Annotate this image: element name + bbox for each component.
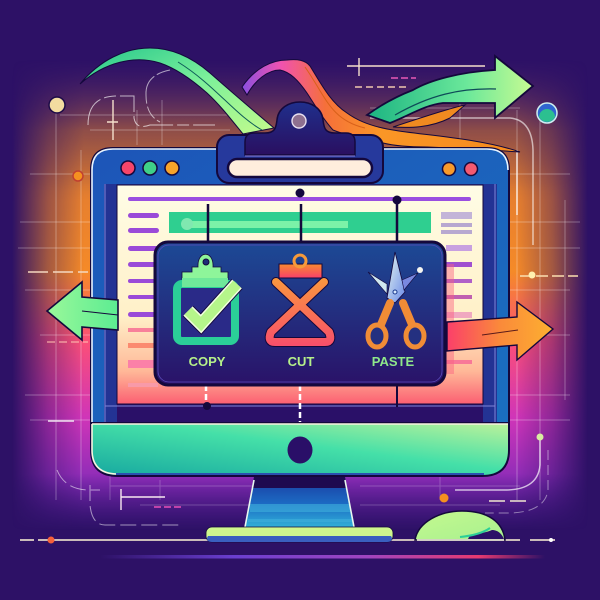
background dots — [49, 97, 557, 502]
label: cut: CUT — [288, 354, 314, 369]
toolbar connector lines — [204, 189, 401, 424]
window buttons — [121, 161, 478, 176]
screen base strip — [117, 404, 483, 424]
gradient underline — [100, 555, 545, 558]
label: copy: COPY — [189, 354, 226, 369]
decorative crosses and dashes — [28, 58, 578, 510]
icon panel — [155, 242, 445, 385]
monitor stand — [245, 477, 354, 527]
right text lines — [441, 212, 472, 374]
monitor bezel — [91, 148, 509, 423]
page header line — [128, 197, 471, 201]
right orange arrow — [447, 302, 553, 360]
left green arrow — [47, 282, 118, 340]
power button — [288, 436, 312, 464]
icon: paste scissors — [368, 252, 424, 347]
label: paste: PASTE — [372, 354, 415, 369]
monitor base — [206, 527, 393, 542]
chin of monitor — [91, 423, 509, 476]
mouse — [415, 511, 505, 540]
background — [14, 73, 586, 522]
ribbon arrow: purple to orange — [242, 60, 520, 152]
background grid and dashed lines — [18, 70, 580, 525]
clipboard clip — [217, 102, 383, 183]
floor line — [20, 536, 555, 544]
monitor — [91, 148, 509, 424]
page text lines — [128, 213, 159, 387]
green address bar — [169, 212, 431, 233]
green curved arrow, top right — [367, 56, 533, 127]
screen surround — [104, 184, 497, 424]
screen page — [117, 185, 483, 404]
green ribbon swoosh — [80, 48, 274, 134]
icon: copy clipboard with check — [177, 254, 237, 341]
icon: cut x — [270, 255, 330, 342]
